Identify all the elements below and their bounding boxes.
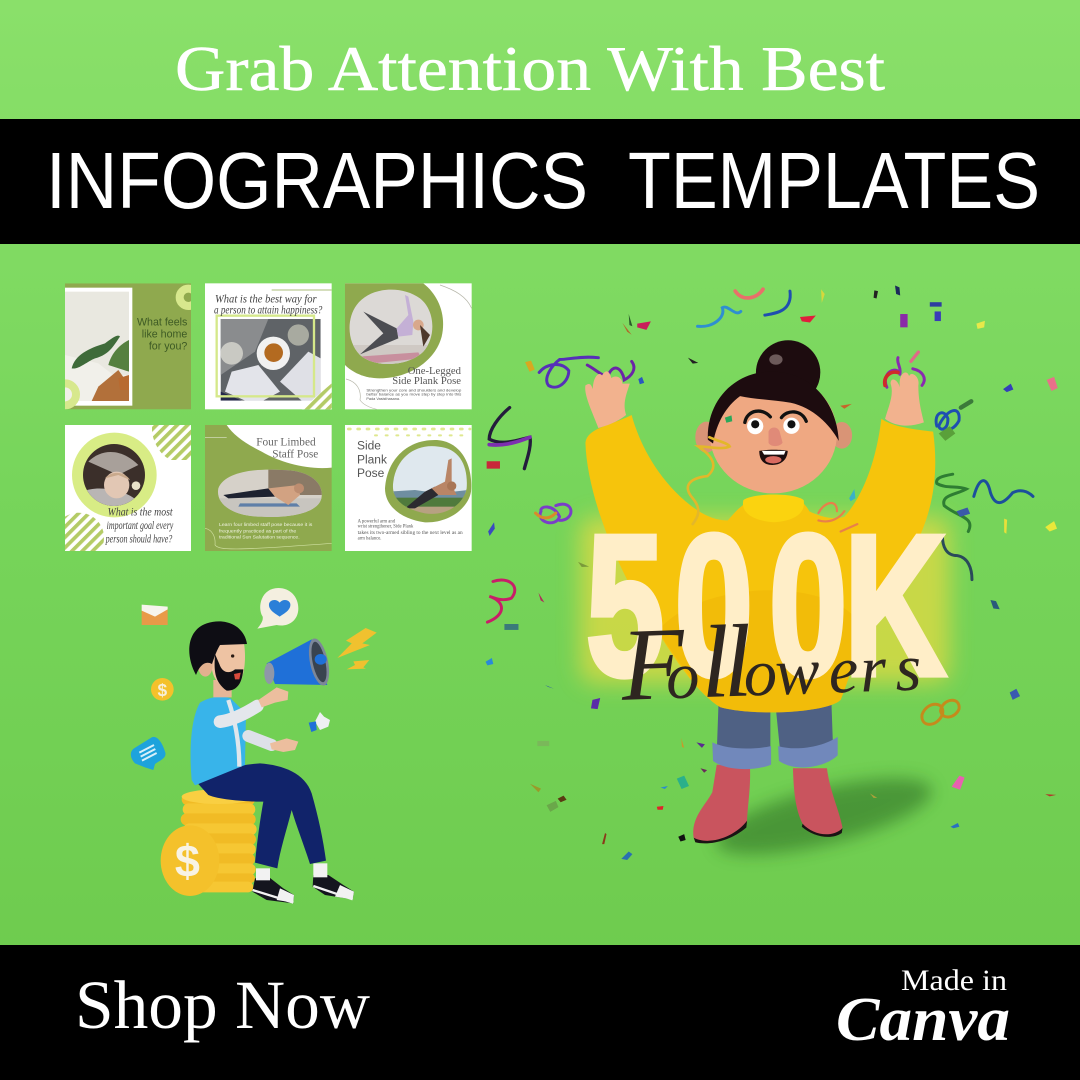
icon: chat bubble [131, 737, 165, 770]
thumbnail 6 body: arm balance. [358, 537, 381, 542]
hands [585, 371, 630, 428]
panel: template thumbnails [54, 283, 472, 551]
thumbnail 6 title: Plank [357, 453, 388, 467]
thumbnail 6 body: takes its two-armed sibling to the next level as an [358, 531, 463, 536]
face [212, 643, 245, 688]
icon: lightning bolts [337, 628, 377, 669]
thumbnail 5 body: frequently practiced as part of the [219, 529, 297, 534]
made in label: Made in [901, 964, 1007, 997]
illustration: celebrating woman with confetti [486, 286, 1058, 870]
followers script: s [894, 631, 922, 705]
sweater shading [658, 590, 865, 712]
black footer band [0, 945, 1080, 1080]
thumbnail 5: four limbed staff pose [205, 425, 332, 551]
icon: coin stack [181, 789, 257, 892]
man figure [189, 621, 354, 903]
thumbnail 5 body: traditional Sun Salutation sequence. [219, 535, 300, 540]
canva logo wordmark: Canva [836, 986, 1010, 1054]
thumbnail 6 title: Side [357, 439, 381, 453]
icon: megaphone [264, 637, 333, 687]
thumbnail 4 script text: important goal every [107, 518, 174, 532]
thumbnail 5 body: Learn four limbed staff pose because it is [219, 522, 313, 527]
thumbnail 4: most important goal [65, 425, 191, 551]
band title: first word: INFOGRAPHICS [46, 136, 588, 225]
shorts [717, 702, 833, 753]
beard [215, 654, 243, 691]
mouth [759, 450, 788, 465]
thumbnail 2 script text: What is the best way for [215, 291, 317, 305]
thumbnail 1: what feels like home [65, 284, 191, 410]
thumbnail 2 script text: a person to attain happiness? [214, 303, 322, 317]
boots [693, 765, 750, 842]
black title band [0, 119, 1080, 244]
shoes [252, 877, 294, 903]
thumbnail 5 title: Staff Pose [272, 448, 318, 460]
sweater [585, 415, 935, 712]
thumbnail 3 body: Strengthen your core and shoulders and develop [366, 388, 461, 392]
icon: heart speech bubble [257, 588, 298, 629]
shirt [191, 697, 246, 785]
followers script: l [699, 605, 731, 720]
woman figure [585, 340, 935, 843]
500K number: 500K [586, 494, 945, 717]
followers script: l [721, 604, 754, 719]
icon: large dollar coin: $ [175, 836, 200, 887]
followers script: F [618, 607, 688, 723]
floor shadow [710, 763, 938, 870]
neck [213, 680, 232, 697]
thumbnail 6 body: A powerful arm and [358, 519, 396, 524]
followers script: o [665, 639, 701, 713]
confetti pieces [637, 321, 651, 330]
followers script: e [827, 634, 859, 708]
thumbnail 3 title: Side Plank Pose [392, 376, 461, 387]
thumbnail 3 body: Pada Vasisthasana. [366, 397, 400, 401]
bun [756, 340, 820, 405]
eyes [745, 411, 806, 434]
nose [769, 427, 783, 446]
thumbnail 4 script text: What is the most [108, 505, 173, 519]
icon: thumbs up [309, 712, 330, 732]
thumbnail 2: best way to attain happiness [205, 283, 332, 409]
illustration: man with megaphone on coins [131, 588, 377, 903]
thumbnail 6: side plank pose [345, 425, 472, 551]
thumbnail 3 body: better balance as you move step by step into this [366, 393, 461, 397]
shop now call to action: Shop Now [75, 967, 370, 1043]
followers script: w [774, 635, 821, 710]
hair [708, 372, 839, 443]
top heading: Grab Attention With Best [175, 34, 886, 104]
upper arm [220, 706, 257, 722]
thumbnail 5 title: Four Limbed [256, 437, 316, 449]
thumbnail 1 text: for you? [149, 341, 187, 353]
glow behind 500K [580, 517, 950, 683]
thumbnail 3: one-legged side plank [345, 283, 472, 409]
thumbnail 6 body: wrist strengthener, Side Plank [358, 525, 414, 530]
followers script: r [859, 633, 888, 707]
head [695, 422, 717, 453]
icon: large dollar coin [161, 825, 219, 896]
thumbnail 6 title: Pose [357, 466, 385, 480]
icon: small coin: $ [158, 680, 168, 700]
followers script: o [742, 637, 778, 711]
hair [189, 621, 247, 675]
lower arm [248, 736, 272, 745]
thumbnail 1 text: like home [142, 329, 187, 341]
thumbnail 1 text: What feels [137, 317, 187, 329]
confetti [487, 289, 1033, 724]
ribbons over figure [688, 404, 857, 532]
thumbnail 4 script text: person should have? [105, 531, 172, 545]
trousers [198, 763, 326, 868]
icon: small coin [151, 678, 174, 701]
icon: envelope [142, 605, 168, 625]
thumbnail 3 title: One-Legged [408, 366, 462, 377]
